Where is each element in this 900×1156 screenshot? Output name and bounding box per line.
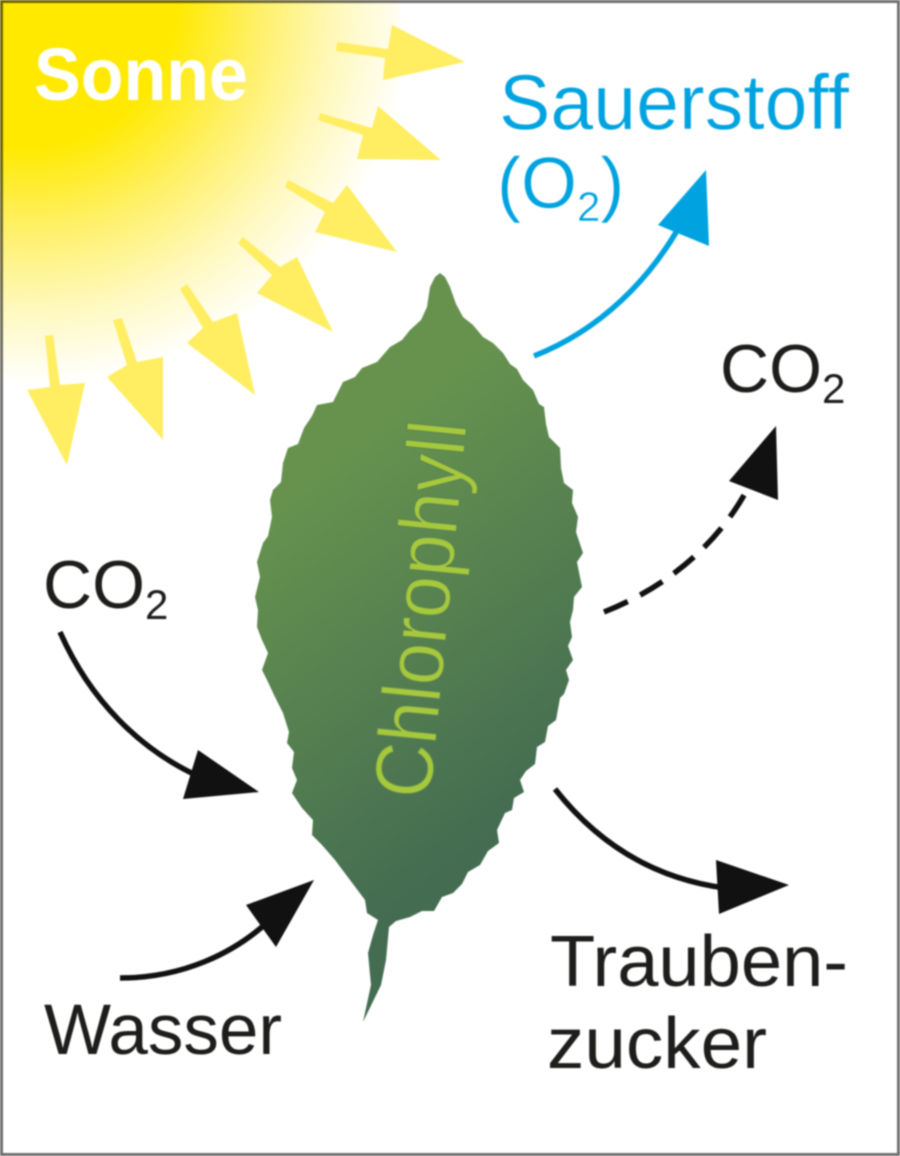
- label: Wasser: Wasser: [44, 991, 282, 1070]
- label: Sauerstoff (O2): 2: [577, 183, 600, 230]
- label: Traubenzucker: [547, 922, 848, 1084]
- label: CO2 left: 2: [145, 581, 168, 628]
- label: Sauerstoff (O2): Sauerstoff: [499, 58, 849, 146]
- label: Sauerstoff (O2): [497, 58, 849, 230]
- sun glow: [0, 0, 400, 400]
- label: Chlorophyll: Chlorophyll: [357, 417, 485, 802]
- arrow: oxygen: [534, 170, 709, 356]
- label: Traubenzucker: zucker: [547, 1004, 767, 1084]
- arrow: glucose out: [555, 789, 789, 914]
- leaf blade and stem: [255, 273, 583, 1022]
- arrow: CO2 out dashed: [604, 426, 778, 612]
- label: Sauerstoff (O2): (O: [497, 144, 577, 224]
- arrow: CO2 in: [60, 632, 259, 799]
- label: Sonne: Sonne: [34, 33, 248, 116]
- label: CO2 right: 2: [822, 365, 845, 412]
- leaf: [255, 273, 583, 1022]
- label: Traubenzucker: Trauben-: [550, 922, 848, 1002]
- label: CO2 left: CO: [43, 547, 145, 623]
- arrow: water in: [120, 880, 314, 978]
- label: Sauerstoff (O2): ): [600, 144, 624, 224]
- sun rays: [27, 25, 465, 465]
- label: CO2 right: CO: [720, 331, 822, 407]
